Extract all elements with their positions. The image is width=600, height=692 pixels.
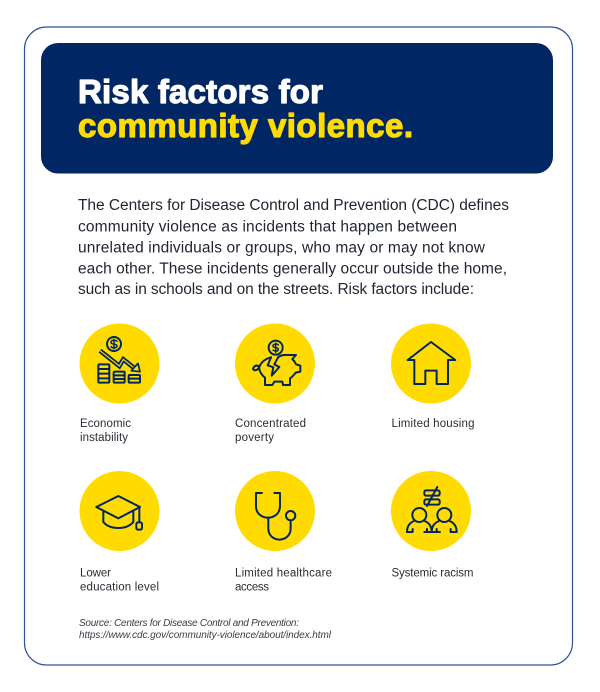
label: Limited healthcare: [235, 568, 332, 580]
source note: https://www.cdc.gov/community-violence/about/index.html: [79, 630, 332, 641]
item: economic instability: [80, 324, 160, 444]
label: Limited housing: [392, 418, 474, 430]
icon: graduation cap: [80, 471, 160, 551]
label: Economic: [80, 418, 131, 430]
title line 2: community violence.: [78, 107, 413, 144]
intro text block: such as in schools and on the streets. Risk factors include:: [78, 281, 474, 298]
label line 2: education level: [80, 582, 159, 594]
intro text block: unrelated individuals or groups, who may or may not know: [78, 240, 486, 256]
label: Lower: [80, 568, 111, 580]
title line 1: Risk factors for: [78, 73, 323, 110]
icon: two people with not-equal sign: [391, 471, 471, 551]
item: limited healthcare access: [235, 471, 332, 594]
intro text block: [78, 197, 509, 298]
label: Systemic racism: [392, 568, 474, 580]
intro text block: community violence as incidents that happen between: [78, 218, 457, 236]
item: limited housing: [391, 324, 474, 430]
label: Concentrated: [235, 418, 306, 430]
icon: falling coins and arrow: [80, 324, 160, 404]
item: concentrated poverty: [235, 324, 315, 444]
panel: title banner: [41, 43, 553, 174]
label line 2: access: [235, 582, 269, 594]
source note: [79, 618, 332, 641]
label line 2: poverty: [235, 432, 274, 444]
item: systemic racism: [391, 471, 474, 580]
source note: Source: Centers for Disease Control and Prevention:: [79, 618, 299, 629]
intro text block: each other. These incidents generally occur outside the home,: [78, 260, 507, 278]
intro text block: The Centers for Disease Control and Prevention (CDC) defines: [78, 197, 509, 214]
icon: broken piggy bank: [235, 324, 315, 404]
label line 2: instability: [80, 432, 128, 444]
icon: stethoscope: [235, 471, 315, 551]
icon: house: [391, 324, 471, 404]
item: lower education level: [80, 471, 160, 594]
